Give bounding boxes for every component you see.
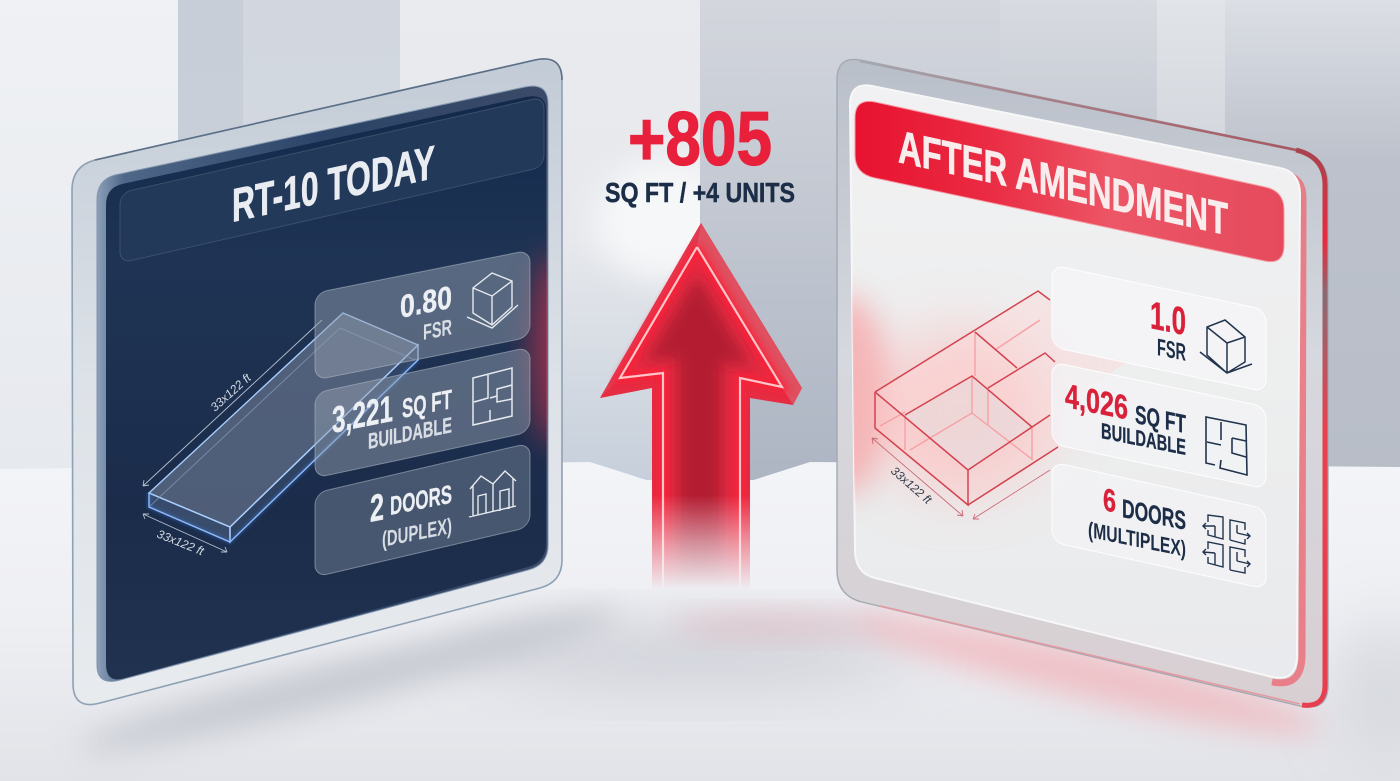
dimension line: long side: 33x122 ft bbox=[208, 370, 254, 414]
stat card: buildable: BUILDABLE bbox=[368, 412, 452, 454]
stat card: buildable: BUILDABLE bbox=[1101, 418, 1186, 460]
stat card: doors: (DUPLEX) bbox=[382, 513, 452, 552]
center arrow bbox=[600, 223, 802, 600]
stat card: FSR: FSR bbox=[1157, 334, 1186, 367]
dimension line: front bbox=[973, 470, 1050, 519]
icon: duplex houses bbox=[469, 471, 516, 517]
panel: after amendment bbox=[800, 59, 1328, 707]
stat card: doors: 2 bbox=[370, 486, 384, 531]
delta caption: SQ FT / +4 UNITS bbox=[605, 177, 795, 208]
stat card: doors: DOORS bbox=[1122, 493, 1186, 536]
inner rim bbox=[97, 86, 548, 681]
stat card: doors: DOORS bbox=[390, 479, 452, 521]
dimension line: short side: 33x122 ft bbox=[155, 527, 207, 559]
frame highlight bbox=[95, 59, 562, 160]
stat card: FSR: FSR bbox=[423, 314, 452, 345]
stat card: FSR: 0.80 bbox=[400, 279, 452, 325]
header bar bbox=[120, 97, 544, 263]
header text: RT-10 TODAY bbox=[232, 136, 435, 233]
icon: cube bbox=[467, 273, 518, 328]
inner red rim bbox=[1272, 174, 1303, 683]
icon: cube bbox=[1200, 320, 1252, 373]
white face bbox=[850, 85, 1300, 678]
header text: AFTER AMENDMENT bbox=[898, 121, 1228, 245]
dark face bbox=[106, 96, 546, 679]
panel: RT-10 today bbox=[72, 59, 577, 705]
stat card: buildable bbox=[1052, 362, 1266, 489]
stat card: FSR bbox=[1052, 265, 1266, 392]
stat card: buildable: SQ FT bbox=[1135, 399, 1186, 439]
top red edge bbox=[860, 61, 1296, 150]
delta value: +805: +805 bbox=[628, 97, 772, 182]
stat card: buildable bbox=[315, 347, 530, 478]
stat card: buildable: SQ FT bbox=[402, 383, 452, 424]
dimension line: side: 33x122 ft bbox=[888, 464, 935, 507]
red glow bbox=[800, 295, 1050, 495]
dimension line: short side bbox=[143, 514, 227, 559]
icon: floor plan bbox=[1206, 417, 1247, 475]
header bar bbox=[855, 101, 1284, 262]
stat card: doors: (MULTIPLEX) bbox=[1088, 517, 1186, 562]
glass frame bbox=[837, 59, 1328, 707]
stat card: buildable: 3,221 bbox=[332, 387, 393, 441]
bottom pink edge bbox=[880, 606, 1300, 704]
red right edge bbox=[1296, 150, 1325, 705]
icon: floor plan bbox=[473, 368, 512, 425]
dimension line: side bbox=[872, 438, 963, 516]
glass frame bbox=[72, 59, 562, 705]
dimension line: long side bbox=[143, 320, 322, 486]
icon: multiplex units bbox=[1203, 515, 1250, 573]
stat card: FSR bbox=[315, 250, 530, 380]
isometric lot: narrow slab bbox=[149, 313, 418, 542]
isometric lot: wide multi-unit massing bbox=[875, 291, 1130, 505]
stat card: doors bbox=[315, 443, 530, 577]
stat card: doors bbox=[1052, 462, 1266, 589]
stat card: doors: 6 bbox=[1103, 481, 1116, 520]
stat card: buildable: 4,026 bbox=[1065, 377, 1128, 428]
stat card: FSR: 1.0 bbox=[1150, 293, 1186, 344]
red side glow bbox=[533, 255, 577, 445]
